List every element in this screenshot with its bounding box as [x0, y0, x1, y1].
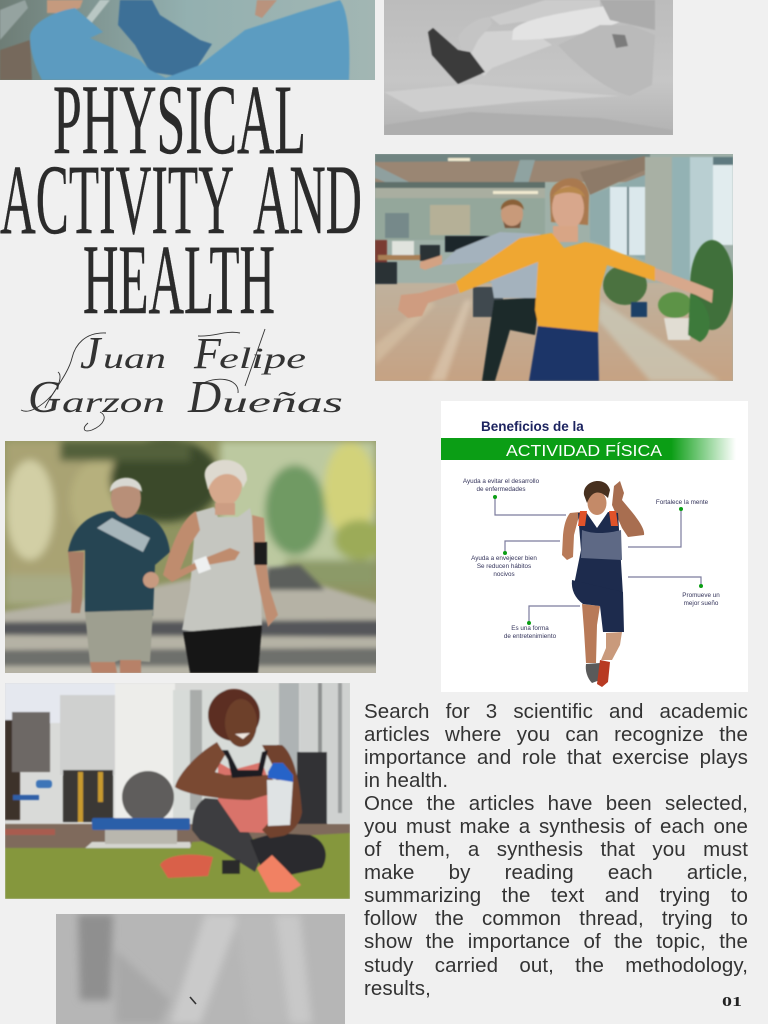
body text: articles where you can recognize the — [364, 723, 748, 746]
author name: elipe — [219, 342, 306, 375]
author name: ueñas — [222, 386, 343, 419]
runner figure — [562, 481, 644, 687]
infographic heading: Beneficios de la — [481, 419, 584, 434]
title: PHYSICAL — [53, 64, 306, 175]
title: HEALTH — [83, 224, 275, 335]
author name: uan — [103, 342, 166, 375]
benefit labels: Promueve un — [682, 592, 720, 599]
body text: follow the common thread, trying to — [364, 907, 748, 930]
photo: woman seated in gym — [5, 683, 350, 899]
title: ACTIVITY — [0, 144, 234, 255]
benefit labels: Ayuda a envejecer bien — [471, 555, 537, 562]
benefit labels: Fortalece la mente — [656, 499, 709, 506]
body text: Once the articles have been selected, — [364, 792, 748, 815]
benefit labels: Se reducen hábitos — [477, 563, 531, 570]
benefit labels: de entretenimiento — [504, 633, 557, 640]
benefit labels: Ayuda a evitar el desarrollo — [463, 478, 540, 485]
author name: G — [28, 371, 61, 422]
author name — [21, 327, 343, 431]
photo: grayscale legs on bed — [384, 0, 673, 135]
benefit labels: de enfermedades — [476, 486, 526, 493]
photo: grayscale fabric — [56, 914, 345, 1024]
benefit labels: mejor sueño — [684, 600, 719, 607]
author name: F — [193, 329, 222, 378]
title: AND — [253, 144, 362, 255]
green banner — [441, 438, 736, 460]
benefit labels: nocivos — [493, 571, 515, 578]
body text: summarizing the text and trying to — [364, 884, 748, 907]
body text: study carried out, the methodology, — [364, 954, 748, 977]
body text — [364, 700, 748, 1000]
author name: arzon — [62, 386, 165, 419]
connector dots — [493, 495, 703, 625]
body text: show the importance of the topic, the — [364, 930, 748, 953]
author name: D — [187, 371, 221, 422]
photo: older couple jogging in park — [0, 438, 386, 680]
benefit labels — [463, 478, 720, 640]
body text: importance and role that exercise plays — [364, 746, 748, 769]
green banner: ACTIVIDAD FÍSICA — [506, 443, 663, 460]
photo: person in blue shirt — [0, 0, 375, 80]
benefit labels: Es una forma — [511, 625, 549, 632]
body text: you must make a synthesis of each one — [364, 815, 748, 838]
body text: in health. — [364, 769, 448, 792]
connector lines — [495, 497, 701, 623]
body text: of them, a synthesis that you must — [364, 838, 748, 861]
infographic panel: beneficios de la actividad física — [441, 401, 748, 692]
page number: 01 — [722, 995, 742, 1010]
body text: Search for 3 scientific and academic — [364, 700, 748, 722]
title — [0, 64, 362, 335]
author name: J — [80, 327, 103, 378]
body text: make by reading each article, — [364, 861, 748, 884]
body text: results, — [364, 977, 431, 1000]
photo: office stretching — [375, 154, 734, 381]
